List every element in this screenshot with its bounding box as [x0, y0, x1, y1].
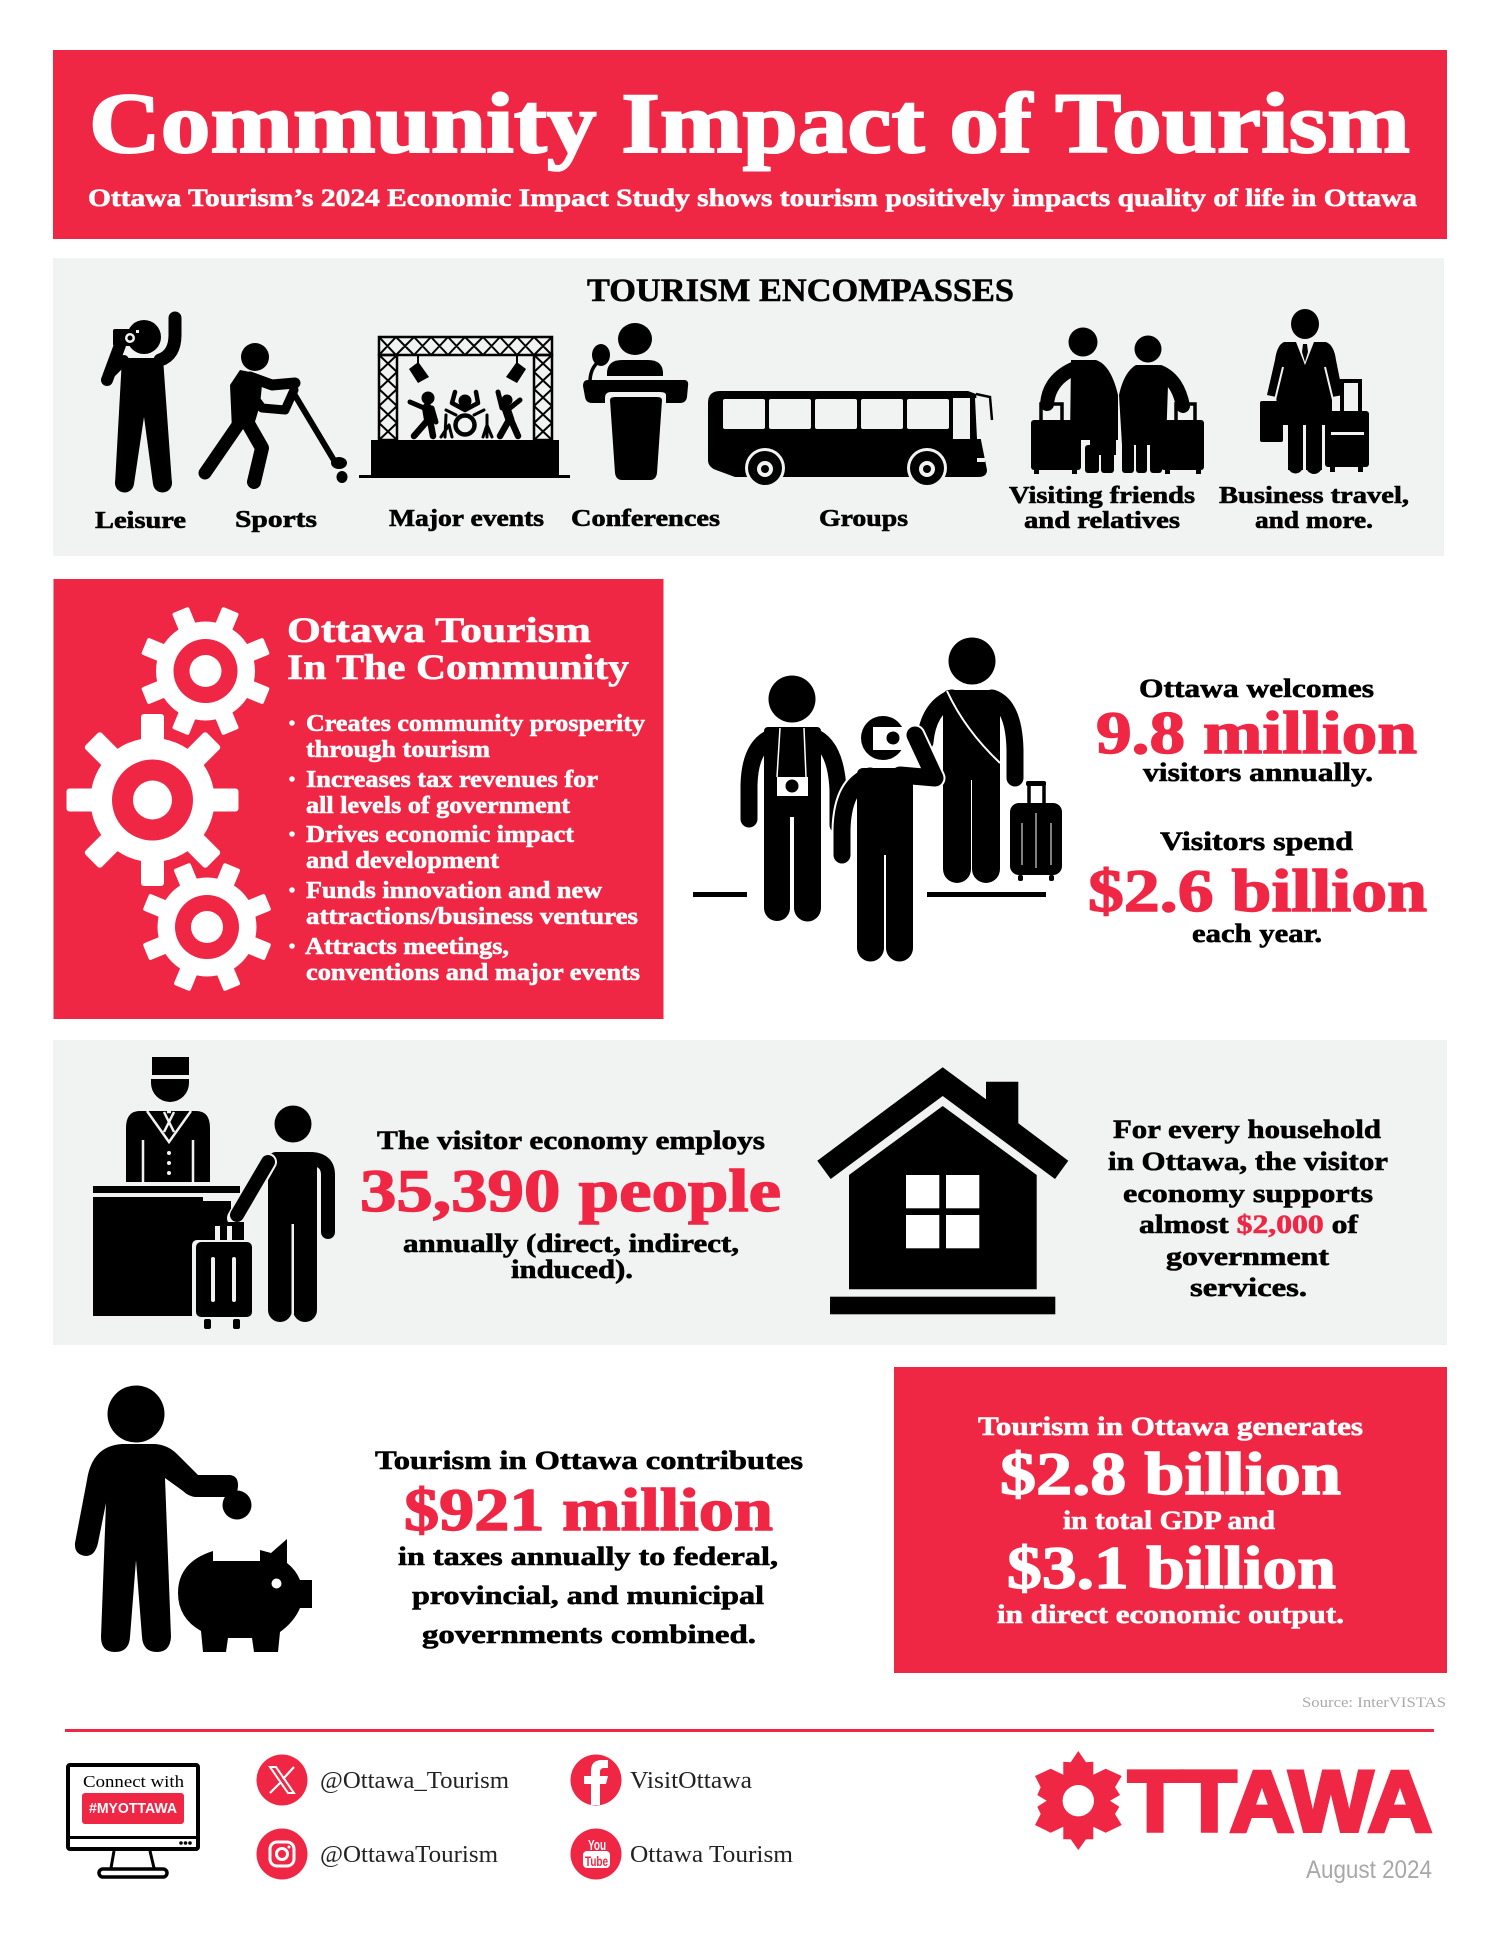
icon: hotel concierge and guest: [93, 1057, 328, 1329]
bullet list: through tourism: [306, 737, 490, 763]
bullet list: [289, 711, 645, 986]
icon: bus: [708, 391, 992, 488]
icon: gears: [66, 607, 271, 991]
label: visiting friends and relatives: Visiting friends: [1009, 483, 1195, 509]
child with camera: [842, 716, 935, 950]
stat: jobs: annually (direct, indirect,: [403, 1229, 739, 1258]
suitcase: [1010, 781, 1062, 881]
label: groups: Groups: [819, 506, 908, 532]
bullet list: Creates community prosperity: [306, 711, 645, 737]
left tourist: [749, 676, 838, 908]
social: youtube: Ottawa Tourism: [630, 1842, 793, 1868]
social: X: [256, 1754, 509, 1806]
icon: leisure photographer: [107, 318, 175, 492]
panel: GDP and economic output: Tourism in Ottawa generates: [978, 1412, 1363, 1441]
panel: ottawa tourism in the community: [54, 579, 664, 1019]
stat: visitors: Ottawa welcomes: [1139, 674, 1374, 703]
social: instagram: [256, 1828, 498, 1880]
panel: GDP and economic output: $3.1 billion: [1007, 1535, 1336, 1601]
tall tourist: [925, 638, 1015, 869]
stat: visitors: 9.8 million: [1096, 700, 1417, 766]
stat: tax contribution: Tourism in Ottawa contributes: [375, 1446, 803, 1475]
stat: visitors: [1096, 674, 1417, 787]
icon: concert stage: [359, 337, 570, 478]
panel: GDP and economic output: [894, 1367, 1447, 1673]
stat: tax contribution: governments combined.: [422, 1620, 756, 1649]
label: leisure: Leisure: [95, 508, 186, 534]
social: youtube: You: [588, 1837, 606, 1854]
source note: Source: InterVISTAS: [1302, 1695, 1446, 1711]
subtitle: Ottawa Tourism’s 2024 Economic Impact Study shows tourism positively impacts quality of life in Ottawa: [88, 185, 1418, 212]
social: X: @Ottawa_Tourism: [320, 1768, 509, 1794]
heading: TOURISM ENCOMPASSES: [587, 273, 1014, 309]
stat: household support: [1108, 1115, 1388, 1302]
bullet list: Drives economic impact: [306, 822, 574, 848]
stat: household support: government: [1166, 1242, 1329, 1271]
stat: tax contribution: $921 million: [404, 1477, 773, 1543]
stat: jobs: induced).: [511, 1255, 633, 1284]
logo: Ottawa: TTAWA: [1128, 1754, 1432, 1850]
stat: household support: services.: [1190, 1273, 1307, 1302]
stat: household support: economy supports: [1123, 1179, 1373, 1208]
label: visiting friends and relatives: [1009, 483, 1195, 534]
label: business travel and more: [1219, 483, 1409, 534]
heading: Ottawa Tourism: [287, 610, 591, 650]
stat: household support: in Ottawa, the visitor: [1108, 1147, 1388, 1176]
stat: tax contribution: [375, 1446, 803, 1649]
stat: household support: almost $2,000 of: [1139, 1210, 1358, 1239]
social: facebook: [570, 1754, 752, 1806]
social: youtube: [570, 1828, 793, 1880]
bullet list: Funds innovation and new: [306, 878, 603, 904]
stat: visitors: visitors annually.: [1143, 758, 1373, 787]
icon: house: [817, 1067, 1068, 1314]
icon: monitor connect with #MYOTTAWA: [66, 1765, 200, 1877]
label: conferences: Conferences: [571, 506, 720, 532]
bullet list: Increases tax revenues for: [306, 767, 598, 793]
stat: visitor spend: $2.6 billion: [1088, 858, 1427, 924]
stat: visitor spend: [1088, 827, 1427, 948]
stat: visitor spend: Visitors spend: [1160, 827, 1354, 856]
label: business travel and more: Business travel,: [1219, 483, 1409, 509]
label: major events: Major events: [389, 506, 544, 532]
stat: jobs: [360, 1126, 781, 1284]
icon: monitor connect with #MYOTTAWA: Connect with: [83, 1772, 185, 1791]
stat: jobs: 35,390 people: [360, 1158, 781, 1224]
social: youtube: Tube: [585, 1853, 608, 1869]
bullet list: conventions and major events: [306, 960, 640, 986]
bullet list: and development: [306, 848, 499, 874]
header banner: [53, 50, 1447, 239]
date: August 2024: [1306, 1856, 1432, 1884]
panel: GDP and economic output: in total GDP and: [1063, 1506, 1276, 1535]
icon: speaker at podium: [583, 323, 688, 480]
stat: visitor spend: each year.: [1192, 919, 1322, 948]
panel: GDP and economic output: in direct economic output.: [997, 1600, 1344, 1629]
social: facebook: VisitOttawa: [630, 1768, 752, 1794]
label: visiting friends and relatives: and relatives: [1024, 508, 1180, 534]
label: sports: Sports: [235, 507, 317, 533]
social: instagram: @OttawaTourism: [320, 1842, 498, 1868]
icon: golfer: [205, 343, 348, 483]
band: [422, 392, 434, 404]
stat: household support: For every household: [1113, 1115, 1382, 1144]
stat: jobs: The visitor economy employs: [377, 1126, 765, 1155]
panel: employment and household: [53, 1040, 1447, 1345]
footer divider: [65, 1729, 1434, 1732]
label: business travel and more: and more.: [1255, 508, 1373, 534]
icon: person and piggy bank: [75, 1386, 312, 1652]
bullet list: Attracts meetings,: [305, 934, 509, 960]
icon: monitor connect with #MYOTTAWA: #MYOTTAWA: [89, 1801, 178, 1817]
icon: three tourists: [693, 638, 1062, 950]
bullet list: all levels of government: [306, 793, 570, 819]
title: Community Impact of Tourism: [89, 75, 1410, 171]
heading: [287, 610, 629, 687]
panel: GDP and economic output: $2.8 billion: [1000, 1441, 1341, 1507]
panel: tourism encompasses: [53, 258, 1444, 556]
stat: tax contribution: in taxes annually to federal,: [398, 1542, 778, 1571]
icon: business traveller: [1260, 309, 1369, 474]
icon: family with luggage: [1031, 328, 1204, 474]
bullet list: attractions/business ventures: [306, 904, 638, 930]
heading: In The Community: [287, 647, 629, 687]
stat: tax contribution: provincial, and municipal: [412, 1581, 764, 1610]
